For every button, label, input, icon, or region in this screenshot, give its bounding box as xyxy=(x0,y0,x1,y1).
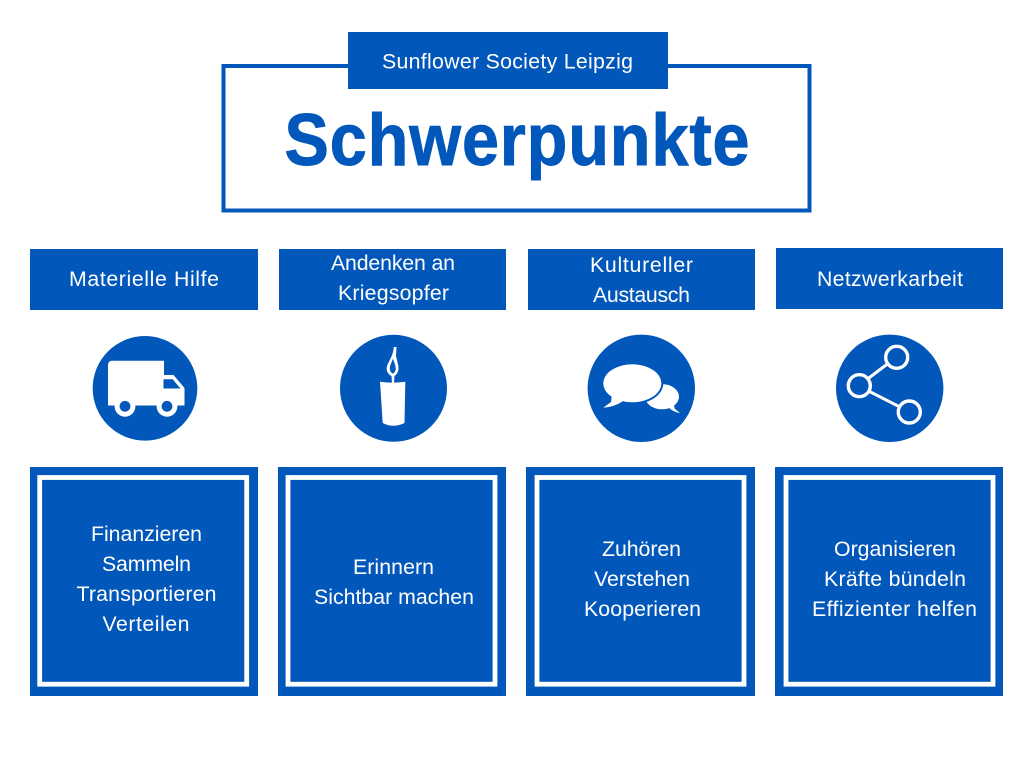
category label: Materielle Hilfe xyxy=(69,267,219,291)
column: Kultureller Austausch xyxy=(526,249,755,696)
activities panel: Zuhören xyxy=(602,537,681,561)
category label: Kriegsopfer xyxy=(338,281,449,305)
column: Andenken an Kriegsopfer xyxy=(278,249,506,696)
category label xyxy=(30,249,258,310)
activities panel xyxy=(30,467,258,696)
category label xyxy=(776,248,1003,309)
activities panel: Organisieren xyxy=(834,537,956,561)
icon: candle xyxy=(340,335,447,442)
column: Netzwerkarbeit xyxy=(775,248,1003,696)
activities panel xyxy=(278,467,506,696)
activities panel: Transportieren xyxy=(76,582,216,606)
activities panel xyxy=(526,467,755,696)
category label: Austausch xyxy=(593,283,690,307)
activities panel: Finanzieren xyxy=(91,522,202,546)
icon: truck xyxy=(93,336,197,441)
title block xyxy=(224,32,810,210)
activities panel: Sichtbar machen xyxy=(314,585,474,609)
icon: share network xyxy=(836,335,943,442)
category label: Kultureller xyxy=(590,253,693,277)
category label xyxy=(528,249,755,310)
column: Materielle Hilfe xyxy=(30,249,258,696)
activities panel: Verstehen xyxy=(594,567,690,591)
activities panel: Effizienter helfen xyxy=(812,597,977,621)
heading: Schwerpunkte xyxy=(284,99,750,181)
activities panel: Erinnern xyxy=(353,555,434,579)
activities panel: Sammeln xyxy=(102,552,191,576)
category label: Netzwerkarbeit xyxy=(817,267,963,291)
title frame xyxy=(224,66,810,210)
category label xyxy=(279,249,506,310)
activities panel xyxy=(775,467,1003,696)
category label: Andenken an xyxy=(331,251,455,275)
activities panel: Kooperieren xyxy=(584,597,701,621)
organisation banner xyxy=(348,32,668,89)
organisation banner: Sunflower Society Leipzig xyxy=(382,50,633,74)
icon: speech bubbles xyxy=(588,335,695,442)
activities panel: Kräfte bündeln xyxy=(824,567,966,591)
activities panel: Verteilen xyxy=(102,612,190,636)
